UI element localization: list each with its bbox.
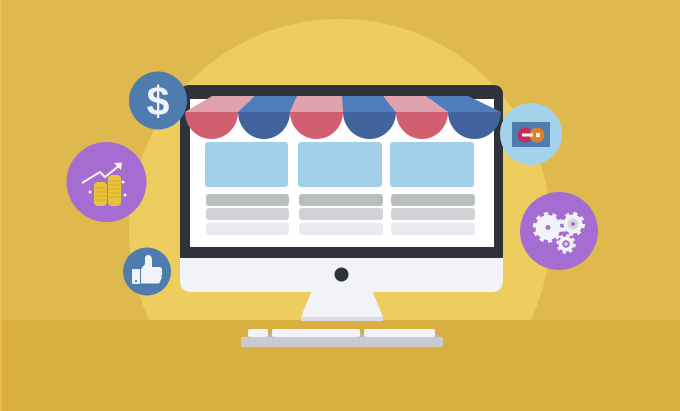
icon: gears — [520, 192, 598, 270]
screen — [190, 99, 494, 247]
product card 3 — [390, 142, 475, 235]
product card 2 — [298, 142, 383, 235]
monitor chin — [180, 256, 503, 292]
sparkles — [88, 180, 126, 196]
monitor stand — [301, 290, 383, 321]
lower gear — [558, 236, 574, 252]
product card 1 — [205, 142, 289, 235]
icon: growth chart and coins — [66, 142, 146, 222]
monitor — [180, 85, 503, 321]
keyboard — [241, 329, 443, 347]
icon: thumbs up — [123, 248, 171, 296]
rising arrow — [82, 162, 122, 183]
large gear — [534, 214, 562, 241]
awning — [185, 96, 501, 139]
product cards — [205, 142, 475, 235]
monitor bezel — [180, 85, 503, 258]
coin stacks — [94, 175, 121, 206]
upper gear — [562, 214, 584, 234]
power button — [334, 268, 348, 282]
icon: dollar — [129, 72, 187, 130]
icon: dollar: $ — [147, 78, 170, 124]
icon: credit card — [500, 103, 562, 165]
